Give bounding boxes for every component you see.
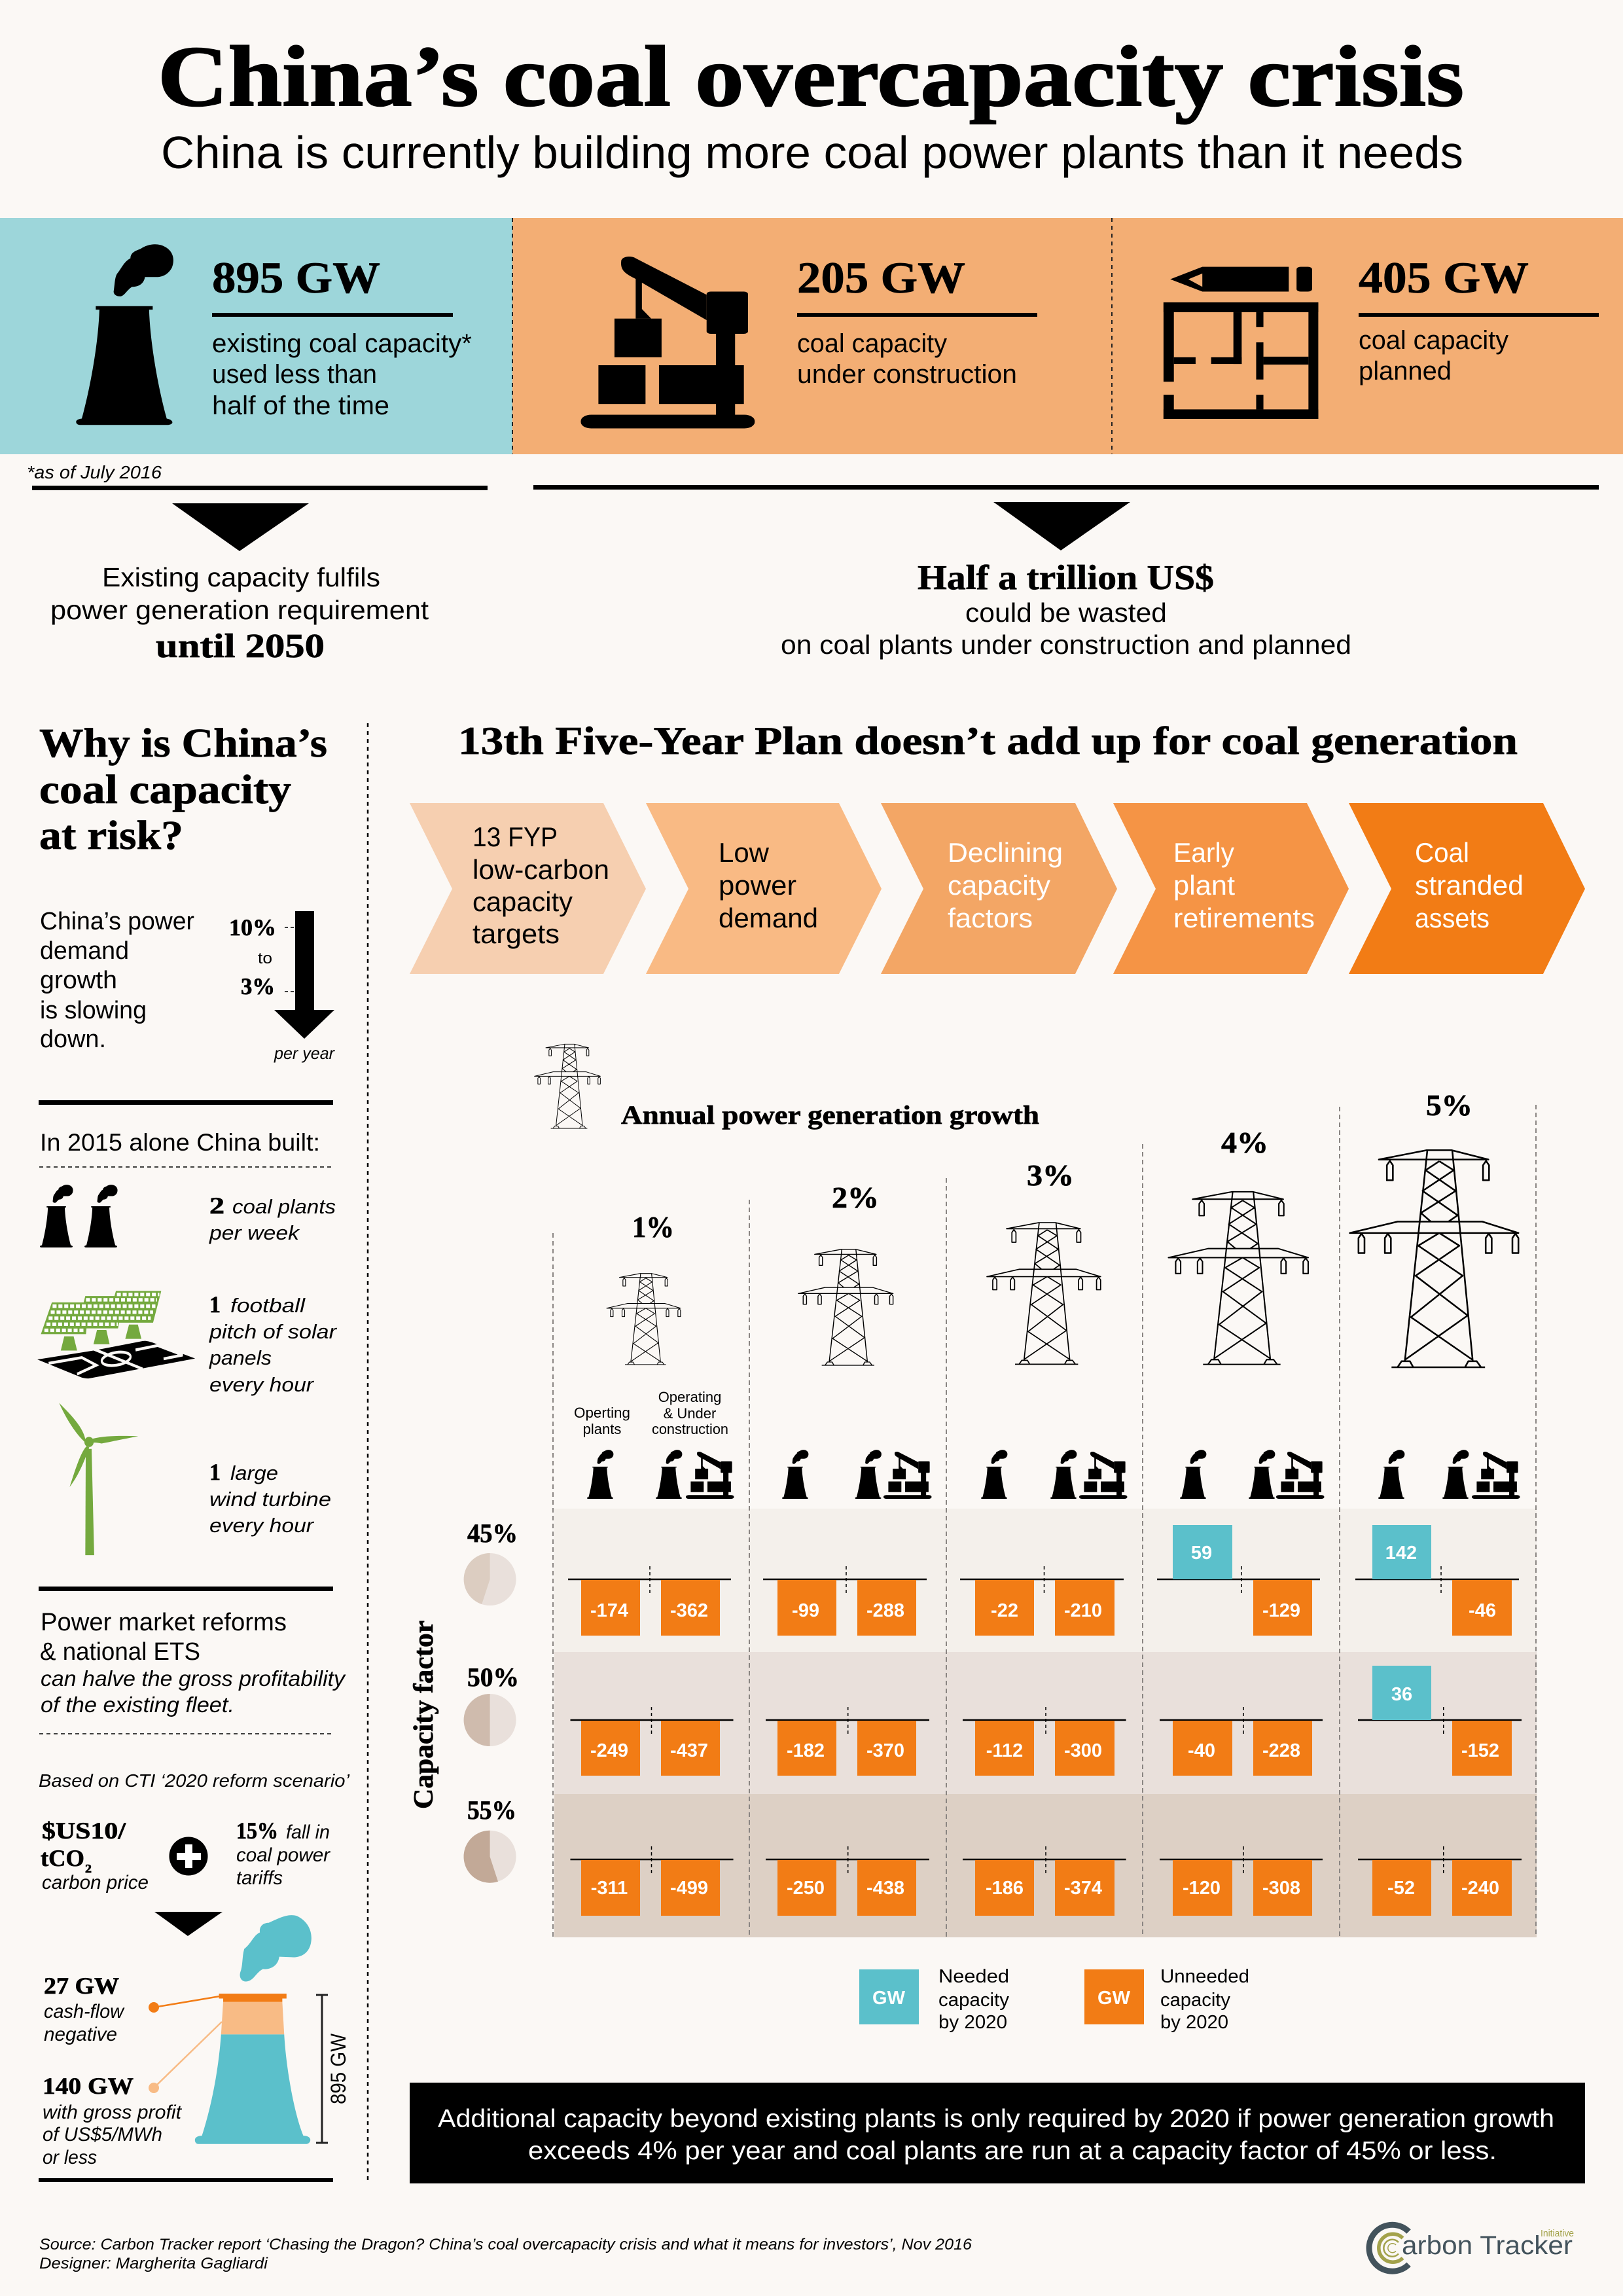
chart: growth falling 10% to 3% <box>229 911 335 1063</box>
chart header: annual power generation growth <box>535 1044 1039 1130</box>
stat: 205 GW: 205 GW <box>797 253 965 302</box>
cell 55% at 3% <box>963 1846 1126 1916</box>
text: 2 coal plants per week <box>209 1193 336 1244</box>
text: tariff fall <box>236 1818 330 1889</box>
cell 50% at 1%: -437 <box>670 1740 708 1761</box>
cell 45% at 2%: -99 <box>792 1600 819 1621</box>
text: carbon price <box>41 1818 149 1893</box>
text: demand growth slowing: is slowing <box>40 997 147 1024</box>
cell 50% at 2%: -182 <box>787 1740 825 1761</box>
cell 45% at 2%: -288 <box>866 1600 904 1621</box>
arrow step 2: low power demand: demand <box>719 903 818 933</box>
arrow step 1: 13 FYP targets: capacity <box>473 886 573 917</box>
text: demand growth slowing: demand <box>40 937 129 965</box>
cell 45% at 3%: -210 <box>1064 1600 1102 1621</box>
panel: existing capacity 895 GW <box>0 218 512 454</box>
chart: growth falling 10% to 3%: 10% <box>229 914 276 941</box>
logo: Carbon Tracker: arbon Tracker <box>1402 2231 1573 2260</box>
cell 50% at 5%: 36 <box>1391 1684 1412 1705</box>
text: demand growth slowing: China’s power <box>40 908 194 935</box>
text: 1 large wind turbine every hour <box>209 1459 331 1537</box>
arrow step 3: declining capacity factors: Declining <box>948 837 1063 868</box>
panel: power market reforms: of the existing fleet. <box>41 1693 234 1717</box>
title: China’s coal overcapacity crisis <box>158 28 1464 124</box>
growth columns: pylons sized by growth <box>607 1088 1518 1367</box>
panel: power market reforms: can halve the gross profitability <box>41 1666 347 1691</box>
row label: 45% <box>464 1518 518 1605</box>
arrow step 5: coal stranded assets <box>1349 803 1585 974</box>
cell 55% at 3%: -186 <box>986 1878 1024 1899</box>
callout: existing capacity until 2050: until 2050 <box>156 628 325 665</box>
arrow step 1: 13 FYP targets: low-carbon <box>473 854 609 885</box>
text: 27 GW cash-flow negative: negative <box>44 2024 117 2045</box>
text: demand growth slowing <box>40 908 194 1053</box>
cell 55% at 5%: -240 <box>1461 1878 1499 1899</box>
arrow step 2: low power demand: Low <box>719 837 770 868</box>
description: planned <box>1359 326 1508 386</box>
text: 140 GW gross profit: 140 GW <box>43 2073 134 2099</box>
description: planned: planned <box>1359 357 1452 386</box>
legend: unneeded capacity: GW <box>1097 1988 1131 2009</box>
icon: solar panels on football pitch <box>37 1291 195 1378</box>
arrow: down triangle <box>993 502 1130 550</box>
cell 50% at 4% <box>1160 1707 1323 1776</box>
column 5% <box>1350 1088 1518 1367</box>
arrow step 5: coal stranded assets: Coal <box>1415 837 1469 868</box>
cell 55% at 5%: -52 <box>1387 1878 1415 1899</box>
arrow step 4: early plant retirements: Early <box>1173 837 1234 868</box>
cell 45% at 1%: -362 <box>670 1600 708 1621</box>
legend: unneeded capacity: capacity <box>1160 1990 1230 2011</box>
text: 140 GW gross profit: or less <box>43 2147 97 2168</box>
text: 140 GW gross profit <box>43 2073 183 2168</box>
arrow step 4: early plant retirements: plant <box>1173 870 1235 901</box>
heading: coal capacity <box>39 768 291 812</box>
description: under construction: under construction <box>797 360 1017 389</box>
description: existing capacity: used less than <box>212 360 377 389</box>
cell 55% at 4%: -308 <box>1262 1878 1300 1899</box>
column 1%: 1% <box>632 1210 674 1244</box>
footer: source and designer: Designer: Margherita Gagliardi <box>39 2255 268 2272</box>
process arrows <box>410 803 1585 974</box>
text: 140 GW gross profit: of US$5/MWh <box>43 2124 162 2145</box>
panel: reform scenario inputs <box>41 1818 330 1936</box>
callout: conclusion <box>410 2083 1585 2183</box>
cell 55% at 5% <box>1358 1846 1522 1916</box>
text: 1 football pitch of solar panels every hour: panels <box>209 1346 272 1369</box>
panel: in 2015 alone China built: In 2015 alone China built: <box>40 1129 320 1156</box>
cell 55% at 2%: -250 <box>787 1878 825 1899</box>
arrow step 2: low power demand <box>646 803 882 974</box>
icon: pencil and floor plan <box>1164 267 1318 419</box>
bar chart: row 50% <box>571 1666 1522 1776</box>
panel: power market reforms: & national ETS <box>40 1638 200 1666</box>
column labels: operating plants: Operting <box>574 1405 630 1421</box>
callout: half a trillion US$: on coal plants under construction and planned <box>781 630 1351 660</box>
column labels: operating plants: plants <box>583 1421 621 1437</box>
legend: needed capacity: GW <box>872 1988 906 2009</box>
panel: under construction and planned band <box>512 218 1623 454</box>
callout line: 27 GW <box>149 1996 220 2013</box>
arrow step 3: declining capacity factors: factors <box>948 903 1033 933</box>
cell 55% at 2% <box>766 1846 929 1916</box>
bracket: 895 GW height <box>316 1995 350 2143</box>
footer: source and designer <box>39 2236 972 2272</box>
arrow: down triangle <box>154 1912 223 1936</box>
row label: 50% <box>464 1662 519 1746</box>
heading: at risk? <box>39 814 183 858</box>
text: demand growth slowing: growth <box>40 967 117 994</box>
cell 50% at 5%: -152 <box>1461 1740 1499 1761</box>
legend: unneeded capacity: by 2020 <box>1160 2012 1228 2033</box>
heading: five-year plan: 13th Five-Year Plan doesn’t add up for coal generation <box>458 719 1518 762</box>
text: 2 coal plants per week: coal plants <box>232 1195 336 1218</box>
cell 50% at 3%: -112 <box>986 1740 1023 1761</box>
cell 50% at 4%: -228 <box>1262 1740 1300 1761</box>
callout line: 140 GW <box>149 2022 222 2093</box>
cell 45% at 4%: -129 <box>1262 1600 1300 1621</box>
row label: 55% <box>464 1795 516 1883</box>
column labels: operating plants <box>574 1405 630 1437</box>
icons: plant and crane per column <box>587 1450 1520 1499</box>
icon: pylon <box>535 1044 600 1128</box>
bar chart: row 45% <box>568 1525 1519 1636</box>
cell 45% at 1% <box>568 1566 731 1636</box>
cell 50% at 2% <box>766 1707 929 1776</box>
chart: growth falling 10% to 3%: 3% <box>241 973 275 999</box>
cell 55% at 1%: -311 <box>591 1878 628 1899</box>
pie: 45% <box>464 1553 516 1605</box>
icon: plus <box>169 1837 208 1876</box>
text: 140 GW gross profit: with gross profit <box>43 2102 183 2123</box>
row label: 45%: 45% <box>467 1518 518 1548</box>
chart: cooling tower share of fleet <box>39 1915 350 2182</box>
column 3%: 3% <box>1027 1158 1074 1192</box>
cell 55% at 4% <box>1160 1846 1323 1916</box>
cell 45% at 3% <box>960 1566 1124 1636</box>
text: 1 large wind turbine every hour: 1 <box>209 1459 221 1485</box>
icon: crane <box>581 257 755 429</box>
text: 1 large wind turbine every hour: wind turbine <box>209 1488 331 1511</box>
subtitle: China is currently building more coal power plants than it needs <box>161 127 1463 178</box>
column 1% <box>607 1210 681 1365</box>
cell 45% at 5%: 142 <box>1385 1543 1417 1564</box>
logo: Carbon Tracker <box>1369 2225 1574 2271</box>
callout: half a trillion US$: could be wasted <box>965 598 1167 628</box>
text: 1 football pitch of solar panels every hour <box>209 1291 338 1396</box>
chart header: annual power generation growth: Annual power generation growth <box>621 1100 1039 1130</box>
legend: needed capacity: by 2020 <box>938 2012 1007 2033</box>
cell 50% at 4%: -40 <box>1188 1740 1215 1761</box>
text: 1 football pitch of solar panels every hour: every hour <box>209 1373 315 1396</box>
arrow step 3: declining capacity factors <box>881 803 1117 974</box>
arrow: down triangle <box>172 503 309 551</box>
axis label: capacity factor: Capacity factor <box>409 1621 439 1809</box>
cell 45% at 2% <box>763 1566 927 1636</box>
text: 1 football pitch of solar panels every hour: pitch of solar <box>209 1320 338 1343</box>
column 2% <box>798 1181 893 1365</box>
callout: existing capacity until 2050: Existing capacity fulfils <box>102 562 380 592</box>
cell 55% at 3%: -374 <box>1064 1878 1102 1899</box>
table row backgrounds <box>554 1509 1537 1937</box>
description: existing capacity: half of the time <box>212 391 389 420</box>
text: carbon price: tCO <box>41 1845 84 1871</box>
text: 2 coal plants per week: per week <box>209 1221 300 1244</box>
row label: 50%: 50% <box>467 1662 519 1692</box>
text: carbon price: $US10/ <box>42 1818 126 1844</box>
text: tariff fall: fall in <box>286 1821 330 1843</box>
row label: 55%: 55% <box>467 1795 516 1825</box>
legend: needed capacity: Needed <box>938 1966 1009 1987</box>
arrow step 2: low power demand: power <box>719 870 796 901</box>
stat: 405 GW: 405 GW <box>1359 253 1529 302</box>
cell 45% at 4%: 59 <box>1191 1543 1212 1564</box>
column 3% <box>987 1158 1101 1364</box>
panel: power market reforms: Based on CTI ‘2020 reform scenario’ <box>39 1770 350 1791</box>
callout: conclusion: exceeds 4% per year and coal plants are run at a capacity factor of 45% or less. <box>528 2137 1497 2165</box>
legend: unneeded capacity: Unneeded <box>1160 1966 1249 1987</box>
callout: existing capacity until 2050: power generation requirement <box>50 595 429 625</box>
column labels: operating and under construction: & Under <box>664 1405 716 1422</box>
heading: Why is China’s <box>39 721 327 766</box>
cell 45% at 4% <box>1157 1525 1320 1636</box>
logo: Carbon Tracker: Initiative <box>1541 2228 1574 2239</box>
arrow step 4: early plant retirements: retirements <box>1173 903 1315 933</box>
bracket: 895 GW height: 895 GW <box>327 2033 350 2104</box>
text: demand growth slowing: down. <box>40 1026 106 1053</box>
cell 45% at 5% <box>1355 1525 1519 1636</box>
callout: conclusion: Additional capacity beyond existing plants is only required by 2020 if power generation growth <box>438 2105 1554 2133</box>
text: 1 football pitch of solar panels every hour: football <box>230 1294 306 1317</box>
footer: source and designer: Source: Carbon Tracker report ‘Chasing the Dragon? China’s coal overcapacity crisis and what it means for investors’, Nov 2016 <box>39 2236 972 2253</box>
cell 45% at 3%: -22 <box>991 1600 1018 1621</box>
text: 27 GW cash-flow negative: cash-flow <box>44 2001 125 2022</box>
description: under construction <box>797 329 1017 389</box>
description: under construction: coal capacity <box>797 329 947 358</box>
panel: in 2015 alone China built <box>37 1129 338 1591</box>
panel: power market reforms <box>39 1609 350 1791</box>
chart: growth falling 10% to 3%: per year <box>274 1043 335 1063</box>
text: 27 GW cash-flow negative: 27 GW <box>44 1973 119 1999</box>
callout: half a trillion US$: Half a trillion US$ <box>918 559 1214 597</box>
text: tariff fall: coal power <box>236 1844 330 1866</box>
cell 50% at 3% <box>963 1707 1126 1776</box>
column 4% <box>1168 1126 1308 1365</box>
cell 50% at 1% <box>571 1707 733 1776</box>
column labels: operating and under construction <box>652 1389 728 1437</box>
legend: needed capacity: capacity <box>938 1990 1010 2011</box>
cell 45% at 1%: -174 <box>590 1600 628 1621</box>
footnote: *as of July 2016 <box>27 462 162 482</box>
panel: power market reforms: Power market reforms <box>41 1609 287 1636</box>
text: 1 large wind turbine every hour: large <box>230 1462 278 1484</box>
cell 55% at 4%: -120 <box>1183 1878 1221 1899</box>
cell 55% at 1%: -499 <box>670 1878 708 1899</box>
arrow step 1: 13 FYP targets <box>410 803 646 974</box>
chart: growth falling 10% to 3%: to <box>258 950 272 967</box>
legend: needed capacity <box>859 1966 1010 2033</box>
cell 55% at 2%: -438 <box>866 1878 904 1899</box>
text: 1 football pitch of solar panels every hour: 1 <box>209 1291 221 1318</box>
cell 50% at 5% <box>1358 1666 1522 1776</box>
text: tariff fall: 15% <box>236 1818 278 1844</box>
panel: why is capacity at risk <box>39 721 335 1105</box>
cell 55% at 1% <box>571 1846 733 1916</box>
icon: wind turbine <box>59 1403 138 1555</box>
callout: existing capacity until 2050 <box>32 486 488 665</box>
arrow step 4: early plant retirements <box>1113 803 1349 974</box>
icon: cooling tower <box>76 244 173 425</box>
icon: two coal plants <box>40 1185 118 1247</box>
text: 1 large wind turbine every hour: every hour <box>209 1514 315 1537</box>
arrow step 5: coal stranded assets: assets <box>1415 903 1489 933</box>
description: existing capacity: existing coal capacity* <box>212 329 472 358</box>
text: 27 GW cash-flow negative <box>44 1973 125 2045</box>
description: existing capacity <box>212 329 472 420</box>
heading <box>39 721 327 858</box>
text: carbon price: 2 <box>85 1862 92 1875</box>
column 5%: 5% <box>1426 1088 1472 1122</box>
arrow step 1: 13 FYP targets: targets <box>473 918 560 949</box>
arrow step 5: coal stranded assets: stranded <box>1415 870 1524 901</box>
text: tariff fall: tariffs <box>236 1867 283 1889</box>
bar chart: row 55% <box>571 1846 1522 1916</box>
text: 2 coal plants per week: 2 <box>209 1193 224 1219</box>
callout: half a trillion US$ <box>533 485 1599 660</box>
pie: 55% <box>464 1831 516 1883</box>
arrow step 1: 13 FYP targets: 13 FYP <box>473 821 558 852</box>
column 4%: 4% <box>1221 1126 1268 1159</box>
column labels: operating and under construction: Operating <box>658 1389 721 1405</box>
cell 50% at 3%: -300 <box>1064 1740 1102 1761</box>
pie: 50% <box>464 1694 516 1746</box>
cell 45% at 5%: -46 <box>1469 1600 1496 1621</box>
arrow step 3: declining capacity factors: capacity <box>948 870 1050 901</box>
description: planned: coal capacity <box>1359 326 1508 355</box>
legend: unneeded capacity <box>1084 1966 1249 2033</box>
stat: 895 GW: 895 GW <box>212 253 380 302</box>
column labels: operating and under construction: construction <box>652 1421 728 1437</box>
cell 50% at 2%: -370 <box>866 1740 904 1761</box>
column 2%: 2% <box>832 1181 879 1214</box>
text: carbon price: carbon price <box>42 1872 149 1893</box>
cell 50% at 1%: -249 <box>590 1740 628 1761</box>
